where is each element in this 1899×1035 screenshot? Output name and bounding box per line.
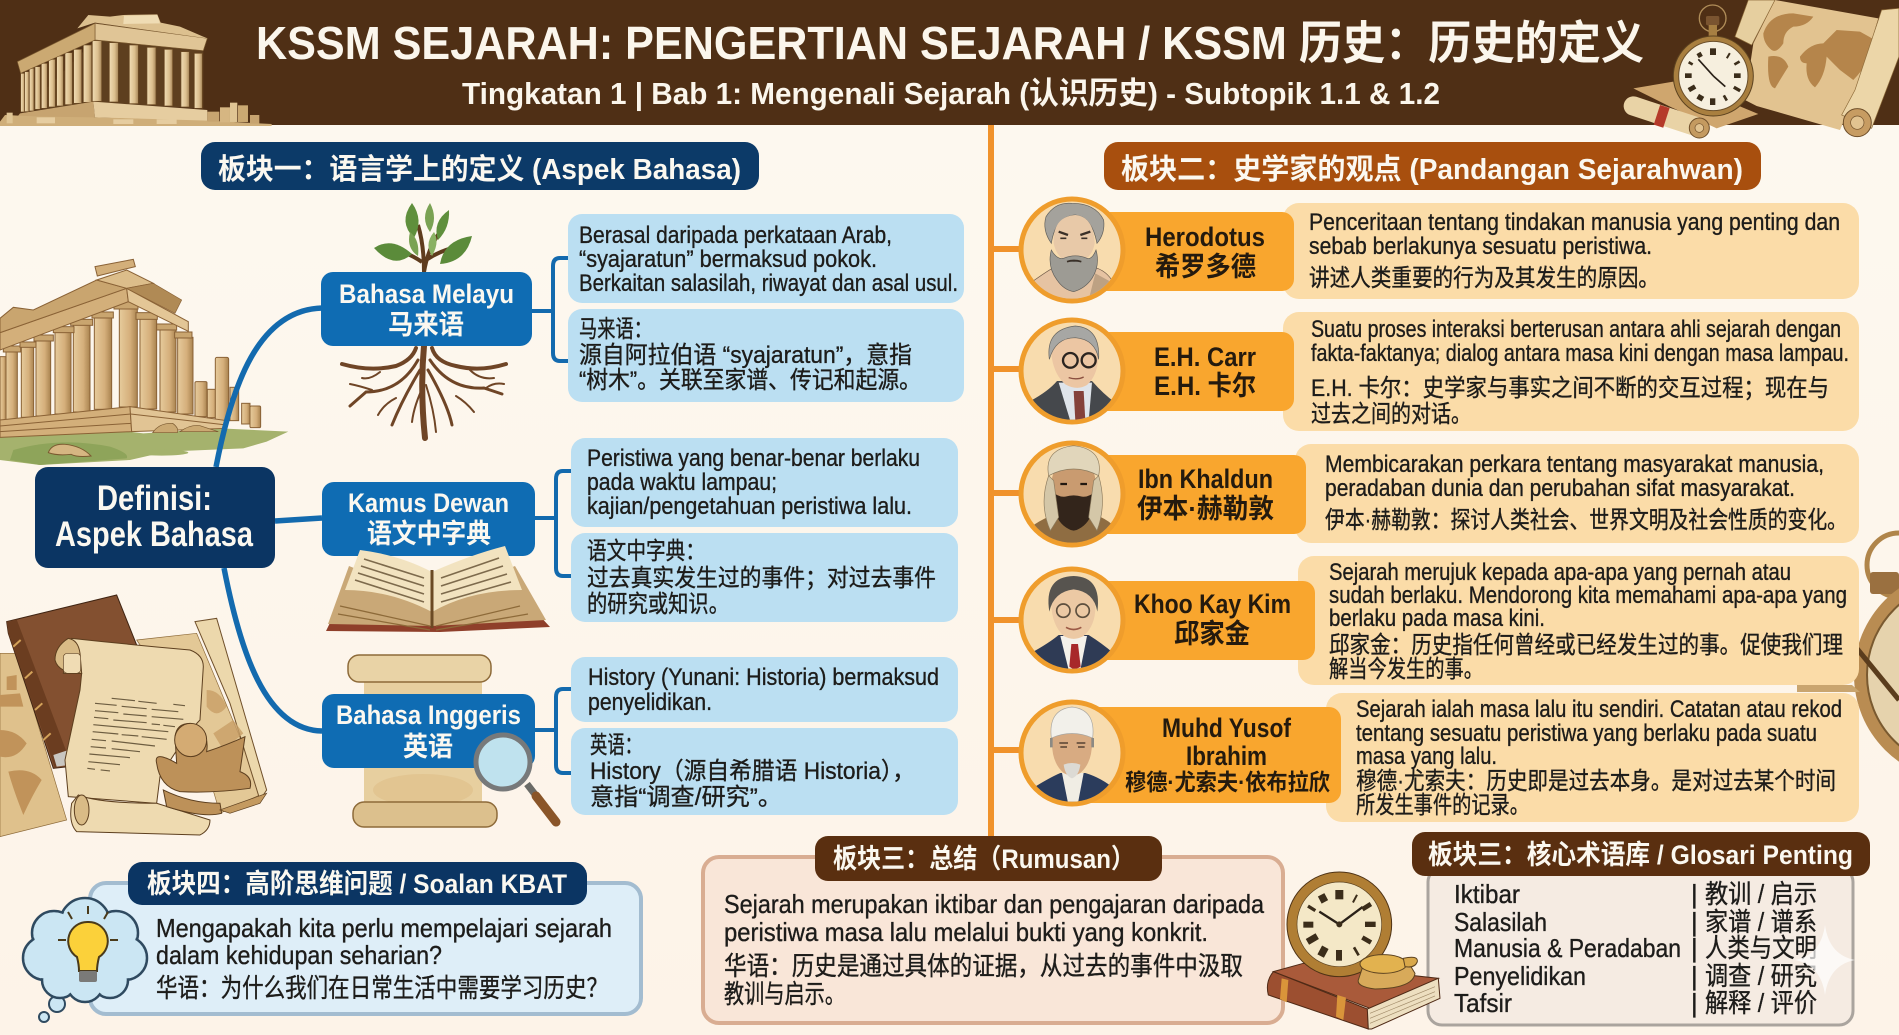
summary text: Sejarah merupakan iktibar dan pengajaran daripada: [724, 889, 1264, 919]
glossary rows: Tafsir: [1454, 988, 1512, 1018]
title: KSSM SEJARAH: PENGERTIAN SEJARAH / KSSM 历史：历史的定义: [256, 17, 1644, 69]
text box: Kamus Dewan definition: pada waktu lampau;: [587, 469, 777, 496]
text box: Kamus Dewan definition: [571, 438, 958, 527]
connectors: node brackets: [532, 258, 572, 773]
text box: Kamus Dewan Chinese definition: [571, 533, 958, 622]
panel 1 heading: 板块一：语言学上的定义 (Aspek Bahasa): [218, 153, 741, 186]
glossary rows: 家谱 / 谱系: [1705, 907, 1817, 937]
glossary rows: Manusia & Peradaban: [1454, 933, 1681, 963]
historian: Muhd Yusof Ibrahim: [994, 693, 1859, 822]
name bar: Ibn Khaldun: [1138, 464, 1273, 494]
historian: Ibn Khaldun: [994, 443, 1859, 547]
description: Membicarakan perkara tentang masyarakat manusia,: [1325, 451, 1824, 478]
summary text: 教训与启示。: [724, 979, 845, 1009]
icon: magnifying glass: [476, 735, 556, 822]
glossary rows: Iktibar: [1454, 879, 1520, 909]
description: 讲述人类重要的行为及其发生的原因。: [1309, 265, 1659, 292]
name bar: [1070, 707, 1341, 803]
panel 2 heading: [1104, 142, 1761, 190]
divider: orange spine: [988, 125, 994, 836]
icon: plant sprout: [374, 203, 472, 272]
text box: Bahasa Melayu Chinese definition: “树木”。关联至家谱、传记和起源。: [579, 367, 921, 394]
text box: Kamus Dewan definition: kajian/pengetahuan peristiwa lalu.: [587, 493, 912, 520]
text box: Kamus Dewan Chinese definition: 的研究或知识。: [587, 591, 729, 618]
node: Bahasa Melayu: [321, 272, 532, 346]
central node: definition: Definisi:: [97, 479, 212, 518]
icon: header temple: [0, 14, 272, 126]
portrait: [1021, 199, 1123, 303]
text box: Bahasa Inggeris Chinese definition: [571, 728, 958, 815]
question text: dalam kehidupan seharian?: [156, 940, 442, 970]
name bar: 伊本·赫勒敦: [1137, 494, 1274, 524]
description: [1326, 693, 1859, 822]
glossary rows: 教训 / 启示: [1705, 879, 1817, 909]
glossary rows: |: [1691, 907, 1698, 937]
glossary rows: |: [1691, 933, 1698, 963]
header banner: [0, 0, 1899, 126]
glossary rows: Salasilah: [1454, 907, 1547, 937]
historian: Khoo Kay Kim: [994, 556, 1859, 685]
text box: Bahasa Melayu Chinese definition: [568, 309, 964, 402]
portrait: [1021, 443, 1123, 547]
portrait: [1021, 320, 1123, 424]
description: 过去之间的对话。: [1311, 401, 1471, 428]
node: Kamus Dewan: 语文中字典: [367, 519, 491, 549]
subtitle: Tingkatan 1 | Bab 1: Mengenali Sejarah (认识历史) - Subtopik 1.1 & 1.2: [462, 76, 1440, 111]
name bar: [1070, 332, 1294, 411]
glossary rows: |: [1691, 879, 1698, 909]
name bar: 穆德·尤索夫·依布拉欣: [1125, 769, 1330, 795]
icon: sparkle: [1795, 925, 1855, 995]
panel 2 heading: 板块二：史学家的观点 (Pandangan Sejarahwan): [1121, 153, 1743, 186]
summary text: peristiwa masa lalu melalui bukti yang konkrit.: [724, 917, 1208, 947]
panel: glossary: [1412, 832, 1870, 1025]
description: [1283, 203, 1859, 299]
name bar: 邱家金: [1174, 619, 1250, 649]
glossary rows: 人类与文明: [1705, 933, 1817, 963]
stub connector: [994, 617, 1022, 623]
node: Kamus Dewan: Kamus Dewan: [348, 488, 509, 518]
heading: 板块三：核心术语库 / Glosari Penting: [1428, 840, 1853, 870]
text box: Bahasa Inggeris definition: [571, 657, 958, 722]
heading: 板块三：总结（Rumusan）: [833, 844, 1135, 874]
stub connector: [994, 246, 1022, 252]
text box: Bahasa Melayu definition: [568, 214, 964, 303]
heading: [1412, 832, 1870, 876]
icon: thought bubble with light bulb: [23, 898, 147, 1022]
node: Bahasa Inggeris: Bahasa Inggeris: [336, 700, 521, 730]
node: Bahasa Inggeris: 英语: [403, 732, 453, 762]
summary text: 华语：历史是通过具体的证据，从过去的事件中汲取: [724, 951, 1243, 981]
text box: Bahasa Melayu definition: Berkaitan salasilah, riwayat dan asal usul.: [579, 270, 958, 297]
text box: Kamus Dewan Chinese definition: 语文中字典：: [587, 538, 705, 565]
description: masa yang lalu.: [1356, 743, 1497, 770]
icon: parchment scroll: [348, 655, 497, 827]
name bar: E.H. 卡尔: [1154, 371, 1256, 401]
name bar: Herodotus: [1145, 222, 1265, 252]
text box: Kamus Dewan Chinese definition: 过去真实发生过的事件；对过去事件: [587, 565, 936, 592]
name bar: [1070, 455, 1306, 534]
description: berlaku pada masa kini.: [1329, 605, 1545, 632]
question text: Mengapakah kita perlu mempelajari sejarah: [156, 913, 612, 943]
icon: tree roots: [342, 346, 506, 438]
name bar: [1070, 212, 1294, 291]
icon: clock on book: [1267, 872, 1440, 1029]
node: Bahasa Melayu: Bahasa Melayu: [339, 279, 514, 309]
description: 解当今发生的事。: [1329, 656, 1483, 683]
description: 所发生事件的记录。: [1356, 792, 1529, 819]
text box: Bahasa Inggeris Chinese definition: 意指“调查/研究”。: [590, 784, 782, 811]
icon: open book: [326, 546, 550, 632]
central node: definition: Aspek Bahasa: [55, 515, 253, 554]
summary text: [724, 889, 1264, 1009]
glossary rows: |: [1691, 988, 1698, 1018]
glossary rows: 调查 / 研究: [1705, 961, 1817, 991]
panel 1 heading: [201, 142, 759, 190]
description: Penceritaan tentang tindakan manusia yang penting dan: [1309, 209, 1840, 236]
description: E.H. 卡尔：史学家与事实之间不断的交互过程；现在与: [1311, 375, 1829, 402]
historian: Herodotus: [994, 199, 1859, 303]
connectors: definition to language nodes: [216, 308, 322, 731]
description: Sejarah merujuk kepada apa-apa yang pernah atau: [1329, 559, 1791, 586]
icon: header map, scroll and pocket watch: [1633, 0, 1899, 138]
panel: KBAT question: [23, 862, 641, 1022]
panel: summary: [703, 836, 1283, 1023]
name bar: Muhd Yusof: [1162, 713, 1292, 743]
stub connector: [994, 366, 1022, 372]
node: Bahasa Melayu: 马来语: [388, 310, 464, 340]
description: [1295, 444, 1859, 543]
node: Bahasa Inggeris: [322, 694, 535, 768]
node: Kamus Dewan: [322, 482, 535, 556]
heading: [815, 836, 1162, 881]
name bar: [1070, 581, 1315, 660]
text box: Bahasa Inggeris Chinese definition: History（源自希腊语 Historia），: [590, 758, 915, 785]
text box: Bahasa Melayu Chinese definition: 马来语：: [579, 316, 652, 343]
description: [1298, 556, 1859, 685]
central node: definition: [35, 467, 275, 568]
text box: Bahasa Melayu definition: “syajaratun” bermaksud pokok.: [579, 246, 877, 273]
portrait: [1021, 569, 1123, 673]
stub connector: [994, 747, 1022, 753]
name bar: Ibrahim: [1186, 741, 1267, 771]
text box: Bahasa Inggeris definition: penyelidikan.: [588, 689, 712, 716]
name bar: E.H. Carr: [1154, 342, 1256, 372]
glossary rows: |: [1691, 961, 1698, 991]
description: peradaban dunia dan perubahan sifat masyarakat.: [1325, 475, 1795, 502]
text box: Bahasa Melayu definition: Berasal daripada perkataan Arab,: [579, 222, 892, 249]
description: [1283, 312, 1859, 431]
text box: Bahasa Melayu Chinese definition: 源自阿拉伯语 “syajaratun”，意指: [579, 342, 912, 369]
icon: right pocket watch: [1797, 533, 1899, 781]
glossary rows: [1454, 879, 1817, 1018]
text box: Kamus Dewan definition: Peristiwa yang benar-benar berlaku: [587, 445, 920, 472]
stub connector: [994, 490, 1022, 496]
name bar: Khoo Kay Kim: [1134, 589, 1291, 619]
question text: [156, 913, 612, 1003]
icon: left temple: [0, 259, 288, 465]
historian: E.H. Carr: [994, 312, 1859, 431]
text box: Bahasa Inggeris definition: History (Yunani: Historia) bermaksud: [588, 664, 939, 691]
heading: 板块四：高阶思维问题 / Soalan KBAT: [147, 869, 567, 899]
glossary rows: Penyelidikan: [1454, 961, 1586, 991]
text box: Bahasa Inggeris Chinese definition: 英语：: [590, 732, 642, 759]
description: tentang sesuatu peristiwa yang berlaku pada suatu: [1356, 720, 1817, 747]
glossary rows: 解释 / 评价: [1705, 988, 1817, 1018]
description: sebab berlakunya sesuatu peristiwa.: [1309, 233, 1652, 260]
heading: [128, 862, 587, 905]
icon: books, map and scrolls pile: [0, 595, 267, 837]
question text: 华语：为什么我们在日常生活中需要学习历史？: [156, 973, 608, 1003]
name bar: 希罗多德: [1155, 252, 1256, 282]
portrait: [1021, 702, 1123, 806]
